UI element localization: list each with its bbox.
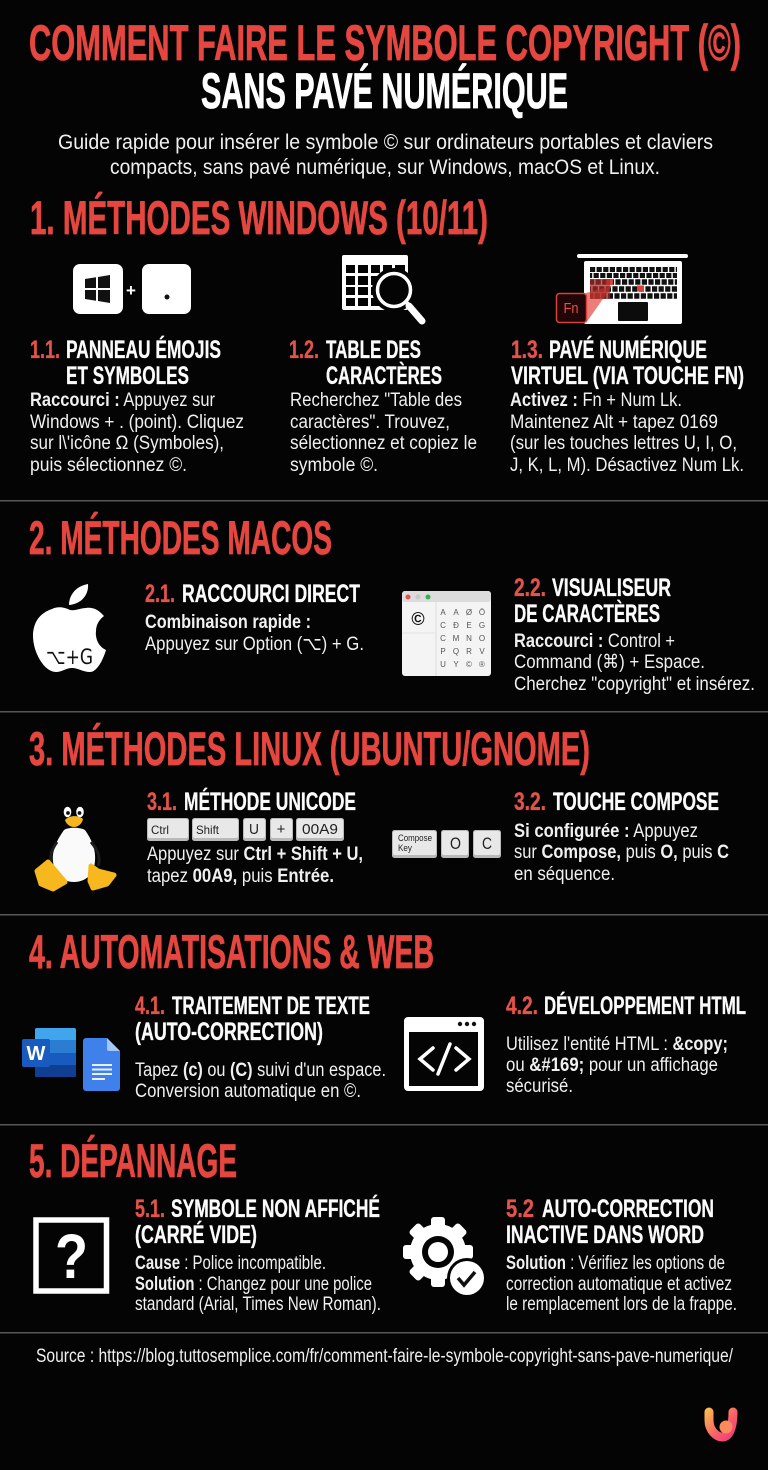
icon: character table with magnifier — [342, 255, 422, 321]
icon: character viewer window: C — [440, 634, 446, 643]
panel: 5.2 auto-correct inactive — [506, 1195, 737, 1315]
section heading: macOS: 2. MÉTHODES MACOS — [29, 511, 332, 564]
icon: Apple logo with shortcut — [33, 584, 106, 672]
icon: character viewer window: Ø — [466, 608, 472, 617]
icon: Compose, O, C keys: Compose — [398, 833, 432, 843]
icon: character viewer window: Ð — [453, 621, 459, 630]
section heading: Windows: 1. MÉTHODES WINDOWS (10/11) — [30, 191, 488, 244]
panel: 1.3 virtual numpad — [510, 335, 744, 476]
panel: 2.1 direct shortcut — [145, 580, 364, 655]
panel: 1.3 virtual numpad: PAVÉ NUMÉRIQUE — [549, 335, 707, 364]
keys: Ctrl Shift U + 00A9: 00A9 — [302, 821, 338, 838]
keys: Ctrl Shift U + 00A9: U — [249, 821, 259, 838]
panel: 1.1 emoji panel: puis sélectionnez ©. — [30, 455, 187, 476]
panel: 1.2 character map: CARACTÈRES — [326, 361, 442, 390]
logo — [709, 1412, 733, 1437]
panel: 2.2 character viewer: 2.2. — [514, 574, 546, 602]
intro text: compacts, sans pavé numérique, sur Windows, macOS et Linux. — [110, 156, 660, 179]
panel: 5.2 auto-correct inactive: Solution : Vérifiez les options de — [506, 1253, 725, 1274]
icon: Compose, O, C keys: C — [482, 834, 492, 853]
panel: 5.1 symbol not shown: standard (Arial, Times New Roman). — [135, 1294, 381, 1315]
panel: 4.1 word processing: Tapez (c) ou (C) suivi d'un espace. — [135, 1060, 386, 1081]
icon: character viewer window: M — [453, 634, 460, 643]
icon: Windows + point keys: + — [126, 281, 136, 300]
icon: character viewer window: A — [453, 608, 459, 617]
icon: Compose, O, C keys: Key — [398, 843, 412, 853]
panel: 4.2 HTML development: Utilisez l'entité HTML : &copy; — [506, 1034, 728, 1055]
panel: 2.2 character viewer: VISUALISEUR — [552, 574, 671, 602]
panel: 5.1 symbol not shown: SYMBOLE NON AFFICHÉ — [171, 1194, 380, 1223]
panel: 1.2 character map: symbole ©. — [290, 455, 378, 476]
panel: 4.2 HTML development: ou &#169; pour un affichage — [506, 1055, 718, 1076]
panel: 2.2 character viewer — [514, 574, 755, 695]
icon: empty square with question mark: ? — [55, 1222, 88, 1292]
panel: 1.1 emoji panel — [30, 335, 244, 476]
panel: 3.2 compose key: 3.2. — [514, 788, 546, 816]
panel: 2.2 character viewer: DE CARACTÈRES — [514, 599, 660, 628]
keys: Ctrl Shift U + 00A9: Shift — [196, 823, 220, 837]
panel: 2.1 direct shortcut: Combinaison rapide : — [145, 612, 311, 633]
icon: character viewer window: © — [466, 660, 472, 669]
panel: 1.3 virtual numpad: Activez : Fn + Num Lk. — [510, 390, 682, 411]
panel: 5.1 symbol not shown: (CARRÉ VIDE) — [135, 1220, 257, 1249]
panel: 3.1 unicode method: MÉTHODE UNICODE — [184, 787, 356, 816]
icon: character viewer window: O — [479, 634, 485, 643]
icon: character viewer window: P — [440, 647, 446, 656]
keys: Ctrl Shift U + 00A9 — [147, 818, 344, 841]
panel: 3.1 unicode method: tapez 00A9, puis Entrée. — [147, 866, 334, 887]
icon: character viewer window: G — [479, 621, 485, 630]
panel: 3.2 compose key: en séquence. — [514, 864, 615, 885]
panel: 1.1 emoji panel: Windows + . (point). Cliquez — [30, 412, 244, 433]
panel: 5.1 symbol not shown: 5.1. — [135, 1195, 165, 1223]
section heading: troubleshooting: 5. DÉPANNAGE — [29, 1134, 237, 1187]
panel: 1.3 virtual numpad: 1.3. — [511, 336, 543, 364]
panel: 3.2 compose key: sur Compose, puis O, puis C — [514, 842, 729, 863]
icon: character viewer window: E — [466, 621, 472, 630]
panel: 1.3 virtual numpad: (sur les touches lettres U, I, O, — [510, 433, 737, 454]
panel: 1.1 emoji panel: 1.1. — [30, 336, 60, 364]
section heading: automation and web: 4. AUTOMATISATIONS & WEB — [29, 925, 434, 978]
icon: character viewer window: © — [411, 609, 425, 629]
icon: character viewer window: Y — [453, 660, 459, 669]
panel: 1.1 emoji panel: sur l\'icône Ω (Symboles), — [30, 433, 224, 454]
icon: character viewer window: Q — [453, 647, 459, 656]
title — [29, 15, 741, 119]
panel: 3.1 unicode method: Appuyez sur Ctrl + Shift + U, — [147, 844, 363, 865]
panel: 1.2 character map: 1.2. — [289, 336, 319, 364]
intro text — [58, 131, 713, 179]
panel: 2.1 direct shortcut: 2.1. — [145, 580, 175, 608]
keys: Ctrl Shift U + 00A9: + — [277, 821, 286, 838]
panel: 4.1 word processing: TRAITEMENT DE TEXTE — [172, 992, 370, 1020]
panel: 4.2 HTML development — [506, 991, 746, 1097]
panel: 1.1 emoji panel: Raccourci : Appuyez sur — [30, 390, 216, 411]
panel: 1.2 character map — [289, 336, 477, 476]
icon: Windows + point keys — [73, 264, 191, 314]
panel: 4.2 HTML development: sécurisé. — [506, 1076, 573, 1097]
panel: 1.3 virtual numpad: Maintenez Alt + tapez 0169 — [510, 412, 718, 433]
panel: 1.1 emoji panel: PANNEAU ÉMOJIS — [66, 335, 221, 364]
icon: character viewer window: R — [466, 647, 472, 656]
icon: Compose, O, C keys — [392, 830, 501, 858]
panel: 3.2 compose key — [514, 788, 729, 885]
icon: character viewer window: V — [479, 647, 485, 656]
panel: 2.2 character viewer: Command (⌘) + Espace. — [514, 652, 705, 673]
icon: code window — [404, 1017, 484, 1091]
icon: character viewer window — [402, 591, 491, 676]
icon: laptop with Fn key — [556, 254, 688, 324]
icon: empty square with question mark — [36, 1220, 106, 1292]
panel: 5.1 symbol not shown: Solution : Changez pour une police — [135, 1274, 372, 1295]
panel: 3.1 unicode method: 3.1. — [147, 788, 177, 816]
icon: character viewer window: C — [440, 621, 446, 630]
panel: 1.2 character map: sélectionnez et copiez le — [290, 433, 477, 454]
panel: 5.2 auto-correct inactive: 5.2 — [506, 1195, 534, 1223]
panel: 4.1 word processing: Conversion automatique en ©. — [135, 1081, 361, 1102]
panel: 3.2 compose key: Si configurée : Appuyez — [514, 821, 698, 842]
panel: 2.2 character viewer: Raccourci : Control + — [514, 631, 675, 652]
panel: 5.1 symbol not shown — [135, 1194, 381, 1315]
keys: Ctrl Shift U + 00A9: Ctrl — [151, 823, 169, 837]
panel: 5.1 symbol not shown: Cause : Police incompatible. — [135, 1253, 326, 1274]
icon: laptop with Fn key: Fn — [564, 300, 578, 317]
panel: 4.1 word processing: (AUTO-CORRECTION) — [135, 1018, 323, 1046]
icon: Apple logo with shortcut: ⌥+G — [46, 645, 93, 669]
panel: 2.1 direct shortcut: RACCOURCI DIRECT — [182, 580, 360, 608]
icon: character viewer window: A — [440, 608, 446, 617]
icon: character viewer window: U — [440, 660, 446, 669]
panel: 2.1 direct shortcut: Appuyez sur Option (⌥) + G. — [145, 634, 364, 655]
panel: 1.1 emoji panel: ET SYMBOLES — [66, 362, 189, 390]
icon: Word and Docs: W — [27, 1043, 46, 1065]
panel: 1.2 character map: Recherchez "Table des — [290, 390, 462, 411]
panel: 4.2 HTML development: 4.2. — [506, 992, 538, 1020]
icon: character viewer window: N — [466, 634, 472, 643]
panel: 4.1 word processing — [135, 992, 386, 1102]
icon: gear with check mark — [403, 1217, 487, 1298]
icon: Word and Docs — [22, 1028, 120, 1091]
panel: 1.2 character map: TABLE DES — [326, 336, 421, 364]
icon: character viewer window: ® — [479, 660, 485, 669]
panel: 4.1 word processing: 4.1. — [135, 992, 165, 1020]
icon: Linux penguin — [37, 807, 114, 889]
intro text: Guide rapide pour insérer le symbole © sur ordinateurs portables et claviers — [58, 131, 713, 154]
panel: 1.2 character map: caractères". Trouvez, — [290, 412, 450, 433]
icon: character viewer window: Ö — [479, 608, 485, 617]
icon: Compose, O, C keys: O — [450, 834, 461, 853]
panel: 3.1 unicode method — [147, 787, 363, 887]
